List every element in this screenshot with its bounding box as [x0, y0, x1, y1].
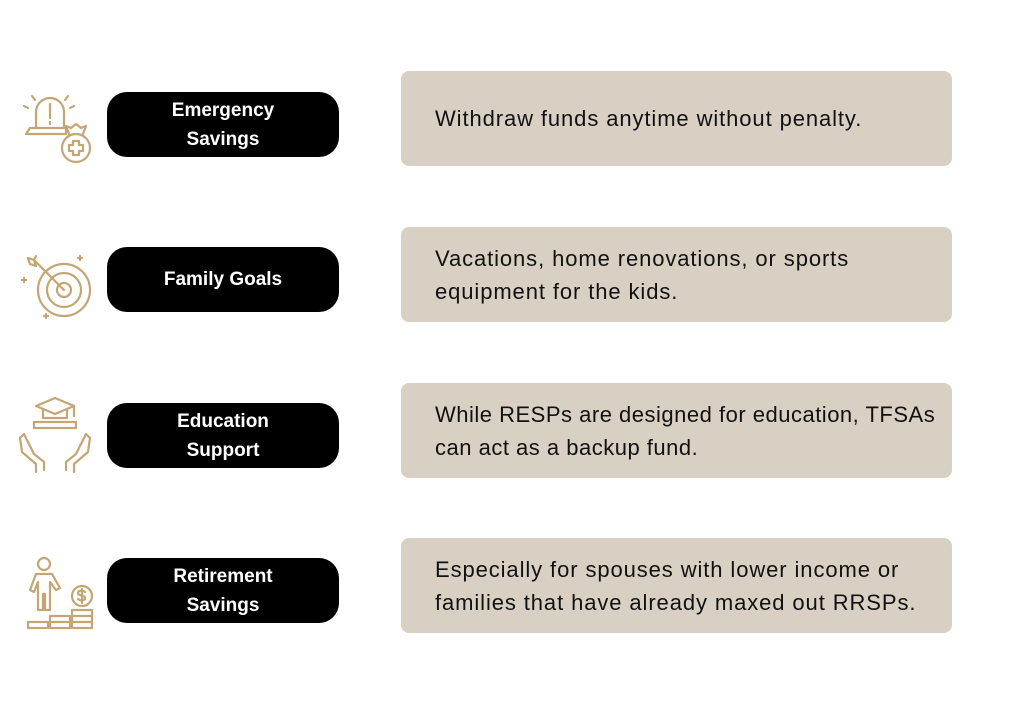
pill: Emergency Savings: Emergency: [172, 100, 274, 120]
box: emergency text: [401, 71, 952, 166]
pill: Education Support: [107, 403, 339, 468]
pill: Retirement Savings: Retirement: [173, 566, 273, 586]
pill: Retirement Savings: Savings: [187, 594, 259, 616]
box: family text: equipment for the kids.: [435, 278, 678, 304]
pill: Emergency Savings: Savings: [187, 128, 259, 150]
box: education text: [401, 383, 952, 478]
box: family text: Vacations, home renovations, or sports: [435, 246, 849, 270]
pill: Emergency Savings: [107, 92, 339, 157]
box: retirement text: families that have already maxed out RRSPs.: [435, 590, 916, 614]
pill: Family Goals: [107, 247, 339, 312]
box: retirement text: [401, 538, 952, 633]
pill: Retirement Savings: [107, 558, 339, 623]
pill: Education Support: Education: [177, 410, 269, 432]
box: education text: can act as a backup fund.: [435, 434, 698, 460]
box: emergency text: Withdraw funds anytime without penalty.: [435, 106, 862, 131]
icon: alarm and money bag: [22, 94, 92, 164]
icon: person and coins: [26, 556, 94, 630]
pill: Education Support: Support: [187, 440, 259, 460]
icon: target: [21, 254, 92, 320]
pill: Family Goals: Family Goals: [164, 269, 282, 290]
box: family text: [401, 227, 952, 322]
icon: hands with graduation cap: [18, 396, 92, 474]
box: retirement text: Especially for spouses with lower income or: [435, 556, 899, 582]
box: education text: While RESPs are designed for education, TFSAs: [435, 402, 935, 426]
